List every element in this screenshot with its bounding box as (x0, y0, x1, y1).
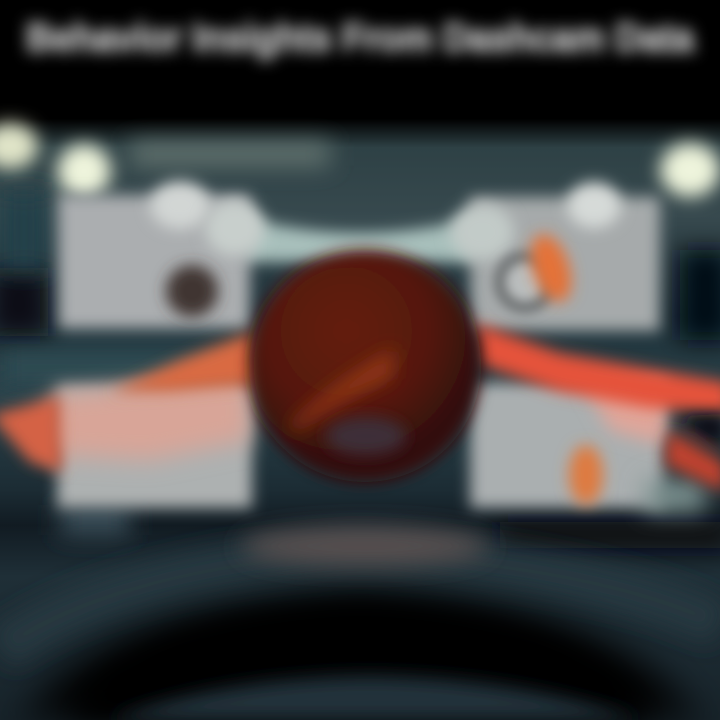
panel tint (50, 375, 250, 460)
wheel rim highlight (240, 526, 490, 566)
needle (290, 348, 395, 432)
icon: ring chart (500, 257, 550, 307)
panel: bottom right (470, 383, 705, 512)
panel: top left (58, 181, 265, 329)
connecting arc between panels (235, 215, 490, 262)
wheel shadow (0, 590, 720, 720)
panel: bottom left (50, 375, 252, 508)
steering wheel arcs (0, 526, 720, 720)
icon: orange bar (569, 445, 603, 505)
arrow: right red band (476, 323, 720, 414)
hub (326, 417, 406, 455)
central circle (249, 250, 481, 482)
panel: top right (450, 182, 660, 331)
inner arc (110, 676, 640, 720)
arrow: left red band (0, 332, 258, 472)
icon: dark dial (166, 265, 218, 317)
arrow: right lower red band (665, 414, 720, 492)
wheel band (0, 552, 720, 650)
panel bump: top left (150, 181, 210, 229)
corner lights (0, 123, 720, 198)
panel bump: top right (567, 182, 621, 228)
panel tint (585, 385, 665, 445)
icon: orange ring segment (523, 229, 579, 307)
